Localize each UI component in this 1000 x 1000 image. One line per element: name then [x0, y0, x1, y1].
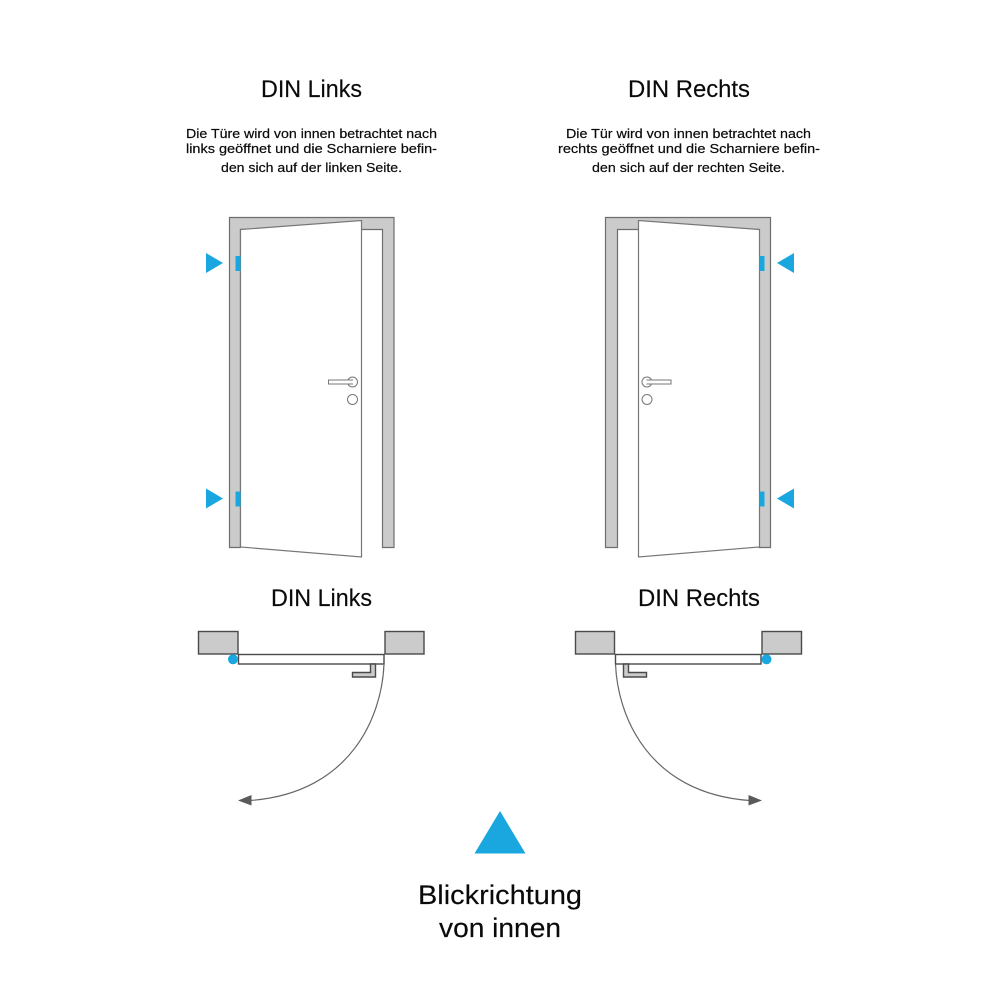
door leaf [638, 220, 760, 557]
upper hinge [760, 256, 764, 271]
heading: DIN Rechts: DIN Rechts [628, 76, 750, 103]
heading: DIN Links plan view: DIN Links [271, 585, 372, 612]
text block: DIN Rechts description [558, 126, 820, 175]
upper hinge marker [777, 253, 794, 273]
text block: DIN Rechts description: den sich auf der rechten Seite. [592, 160, 785, 175]
hinge point [228, 654, 238, 664]
lower hinge [760, 492, 764, 506]
door handle [642, 377, 671, 387]
caption: viewing direction [418, 880, 582, 943]
plan view: DIN Rechts [576, 632, 802, 806]
wall right [385, 632, 424, 654]
heading: DIN Rechts plan view: DIN Rechts [638, 585, 760, 612]
handle [624, 664, 646, 677]
text block: DIN Links description: links geöffnet und die Scharniere befin- [186, 141, 437, 156]
swing arc [616, 664, 750, 800]
upper hinge [236, 256, 240, 271]
text block: DIN Links description: den sich auf der linken Seite. [221, 160, 402, 175]
door elevation: DIN Links [206, 218, 394, 557]
text block: DIN Rechts description: rechts geöffnet und die Scharniere befin- [558, 141, 820, 156]
hinge point [762, 654, 772, 664]
door leaf [240, 220, 362, 557]
arrowhead [238, 795, 252, 806]
keyhole [642, 394, 652, 404]
heading: DIN Links: DIN Links [261, 76, 362, 103]
wall left [576, 632, 614, 654]
wall right [762, 632, 802, 654]
text block: DIN Rechts description: Die Tür wird von innen betrachtet nach [566, 126, 811, 141]
swing arc [250, 664, 384, 800]
keyhole [348, 394, 358, 404]
handle [352, 664, 376, 677]
text block: DIN Links description [186, 126, 437, 175]
door leaf [238, 654, 384, 664]
text block: DIN Links description: Die Türe wird von innen betrachtet nach [186, 126, 437, 141]
door leaf [616, 654, 761, 664]
plan view: DIN Links [198, 632, 424, 806]
lower hinge [236, 492, 240, 506]
door frame [230, 218, 394, 548]
wall left [198, 632, 238, 654]
door elevation: DIN Rechts [606, 218, 794, 557]
door handle [328, 377, 358, 387]
lower hinge marker [777, 488, 794, 508]
caption: viewing direction: von innen [439, 913, 561, 943]
arrowhead [748, 795, 762, 806]
lower hinge marker [206, 488, 223, 508]
door frame [606, 218, 770, 548]
upper hinge marker [206, 253, 223, 273]
icon: viewing direction triangle [474, 811, 526, 854]
caption: viewing direction: Blickrichtung [418, 880, 582, 910]
